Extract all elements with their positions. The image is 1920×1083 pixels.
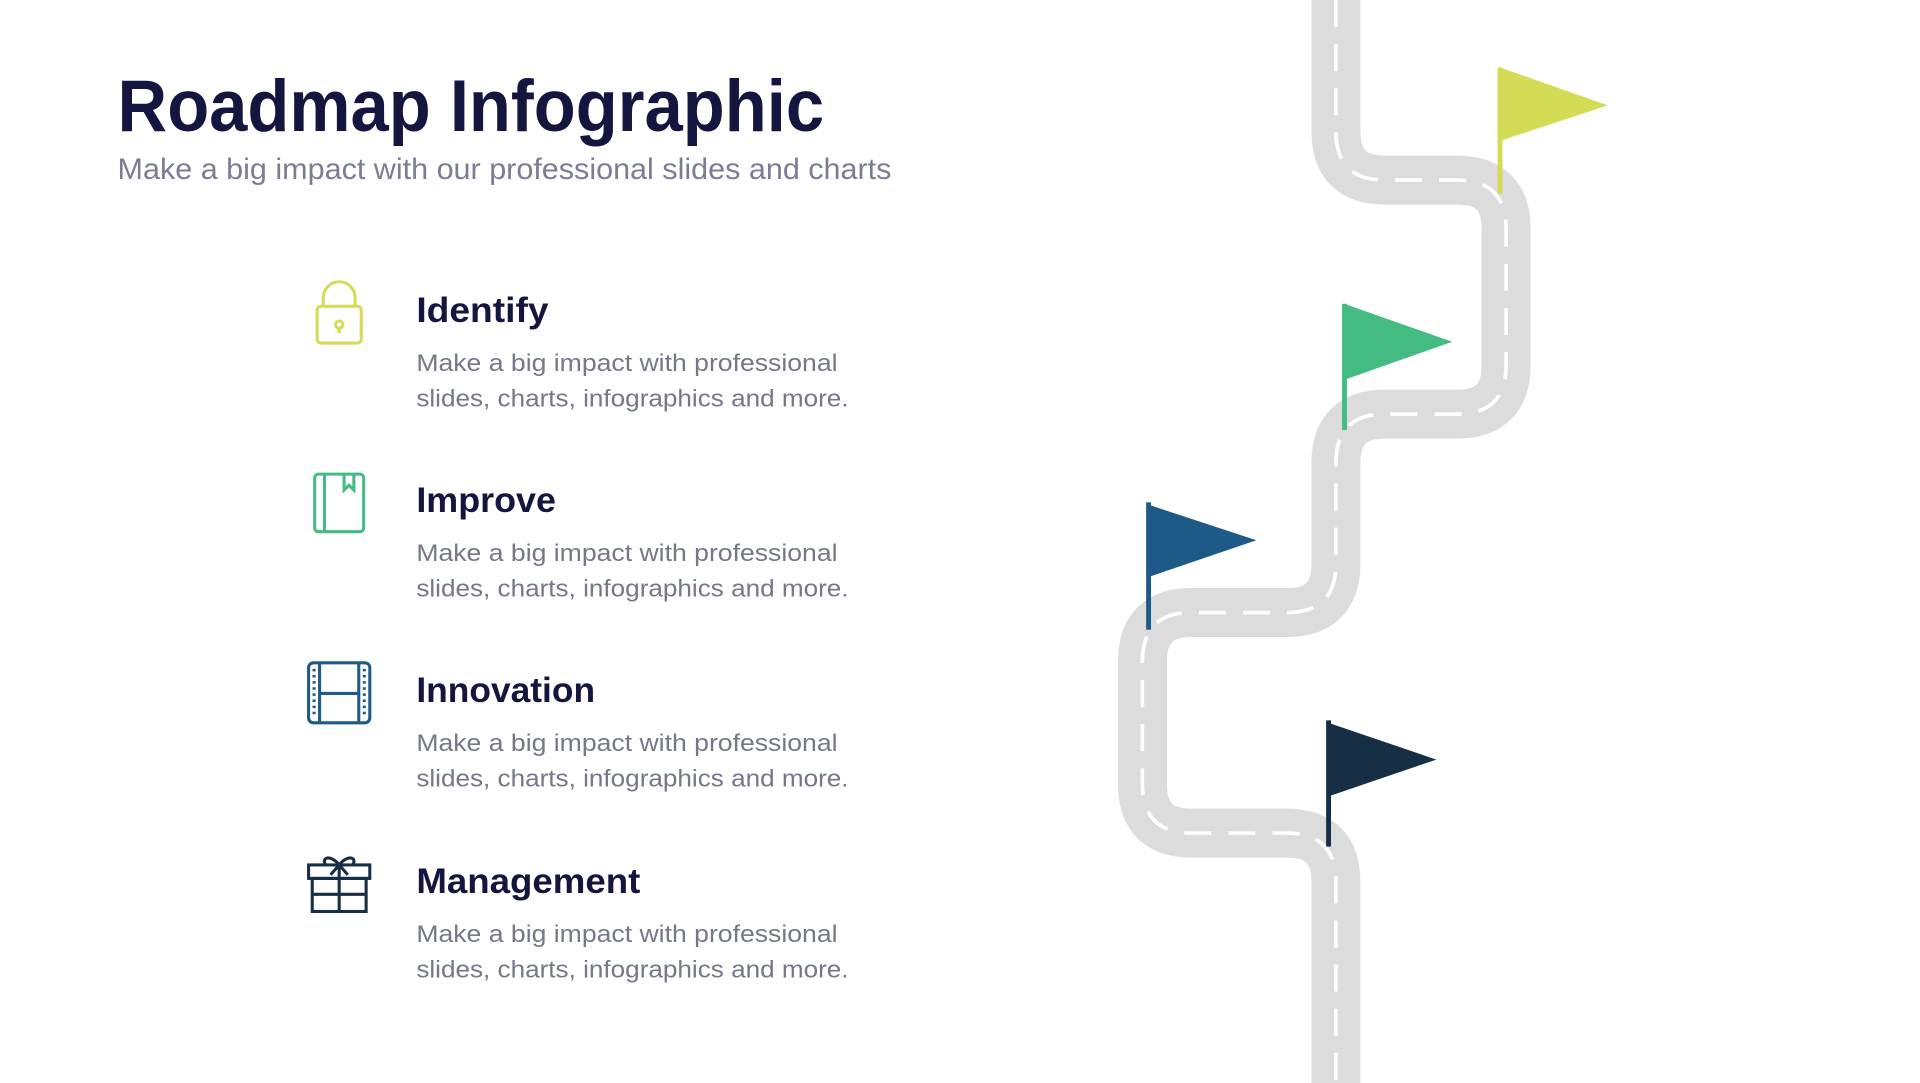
flag: green <box>1342 304 1452 430</box>
item: Identify: Make a big impact with professional <box>416 350 838 377</box>
item: Identify: Identify <box>416 290 549 330</box>
flag: blue <box>1146 502 1256 630</box>
road <box>1142 0 1506 1083</box>
item: Innovation: slides, charts, infographics and more. <box>416 766 849 793</box>
item: Management: slides, charts, infographics and more. <box>416 957 849 984</box>
item: Management: Management <box>416 861 641 901</box>
item: Innovation: Make a big impact with professional <box>416 730 838 757</box>
flag: yellow <box>1498 67 1608 194</box>
flag: dark <box>1326 720 1436 847</box>
title: Roadmap Infographic <box>118 64 824 147</box>
item: Improve <box>416 480 849 603</box>
item: Improve: slides, charts, infographics and more. <box>416 576 849 603</box>
item: Innovation <box>416 670 849 793</box>
item: Management <box>416 861 849 984</box>
item: Innovation: Innovation <box>416 670 595 710</box>
icon: film <box>309 663 370 723</box>
item: Management: Make a big impact with professional <box>416 921 838 948</box>
icon: lock <box>317 282 361 343</box>
item: Improve: Make a big impact with professional <box>416 540 838 567</box>
item: Identify <box>416 290 849 413</box>
item: Identify: slides, charts, infographics and more. <box>416 386 849 413</box>
item: Improve: Improve <box>416 480 556 520</box>
subtitle: Make a big impact with our professional slides and charts <box>118 153 891 186</box>
icon: gift <box>309 858 370 911</box>
icon: book <box>315 474 364 532</box>
